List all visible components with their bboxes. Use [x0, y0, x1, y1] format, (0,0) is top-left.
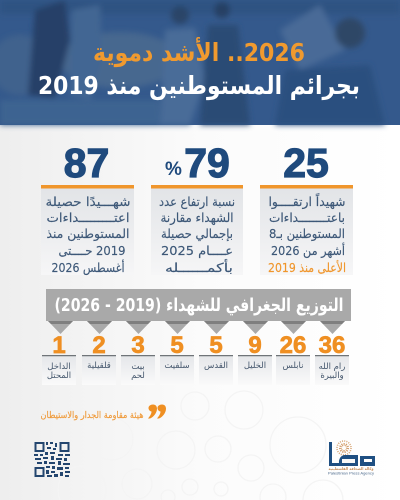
stat card: 87: 87	[64, 140, 109, 186]
source quote	[40, 404, 166, 421]
place labels	[47, 361, 345, 381]
place labels: بيت	[131, 362, 145, 372]
stat card: 25: المستوطنين بـ8	[269, 226, 345, 242]
value numbers: 9	[248, 332, 262, 359]
place labels: والبيرة	[320, 371, 344, 381]
place labels: نابلس	[283, 361, 303, 371]
stat card: 25	[260, 140, 353, 275]
title: orange line: 2026.. الأشد دموية	[93, 37, 305, 68]
distribution chart	[42, 321, 349, 385]
icon: quote mark	[148, 404, 166, 418]
stat card: 87: اعتـــــــــداءات	[46, 210, 130, 225]
place labels: الخليل	[244, 361, 266, 371]
value numbers: 3	[131, 332, 145, 359]
stat card: 25: أشهر من 2026	[271, 242, 345, 259]
logo: Safa agency: Palestinian Press Agency	[328, 472, 374, 476]
stat card: 79%	[151, 140, 243, 275]
stat card: 79%: بأكمــــــله	[165, 259, 233, 275]
distribution heading banner: التوزيع الجغرافي للشهداء (2019 - 2026)	[55, 295, 344, 316]
value numbers	[52, 332, 345, 359]
place labels: لحم	[131, 371, 145, 381]
value numbers: 26	[280, 332, 306, 359]
QR code	[34, 442, 70, 477]
stat card: 79%: 79	[184, 140, 230, 186]
stat card: 79%: %	[165, 159, 182, 180]
distribution heading banner	[46, 289, 351, 321]
source quote: هيئة مقاومة الجدار والاستيطان	[40, 411, 144, 421]
value numbers: 2	[92, 332, 106, 359]
value numbers: 5	[209, 332, 223, 359]
value numbers: 5	[170, 332, 184, 359]
stat card: 79%: نسبة ارتفاع عدد	[159, 194, 235, 210]
stat card: 25: شهيداً ارتقــــوا	[268, 192, 346, 210]
stat card: 87	[41, 140, 134, 276]
background circles	[58, 391, 343, 500]
place labels: الداخل	[47, 362, 71, 372]
place labels: رام الله	[319, 362, 345, 372]
stat card: 25: باعتــــــــداءات	[269, 210, 345, 225]
connector arrows	[48, 321, 345, 334]
place labels: سلفيت	[164, 361, 190, 371]
place labels: القدس	[204, 361, 228, 371]
stat card: 79%: الشهداء مقارنة	[160, 210, 234, 226]
place labels: المحتل	[47, 371, 71, 381]
stat card: 87: 2019 حــــتى	[59, 243, 126, 258]
logo: Safa agency: وكالة الصحافة الفلسطينية	[328, 466, 374, 471]
stat card: 79%: بإجمالي حصيلة	[161, 226, 233, 241]
value numbers: 36	[319, 332, 345, 359]
title: white line: بجرائم المستوطنين منذ 2019	[38, 71, 360, 101]
stat card: 87: المستوطنين منذ	[46, 226, 130, 242]
stat card: 25: الأعلى منذ 2019	[268, 260, 346, 275]
icon: logo dots	[337, 441, 351, 455]
logo: Safa agency	[328, 441, 375, 476]
stat card: 79%: عــــام 2025	[161, 243, 233, 258]
header photo banner	[0, 0, 400, 125]
stat card: 87: شهـــيدًا حصيلة	[46, 194, 130, 210]
label cells	[42, 355, 349, 385]
stat card: 25: 25	[283, 140, 329, 186]
value numbers: 1	[52, 332, 66, 359]
stat card: 87: أغسطس 2026	[52, 259, 124, 276]
place labels: قلقيلية	[87, 361, 111, 371]
